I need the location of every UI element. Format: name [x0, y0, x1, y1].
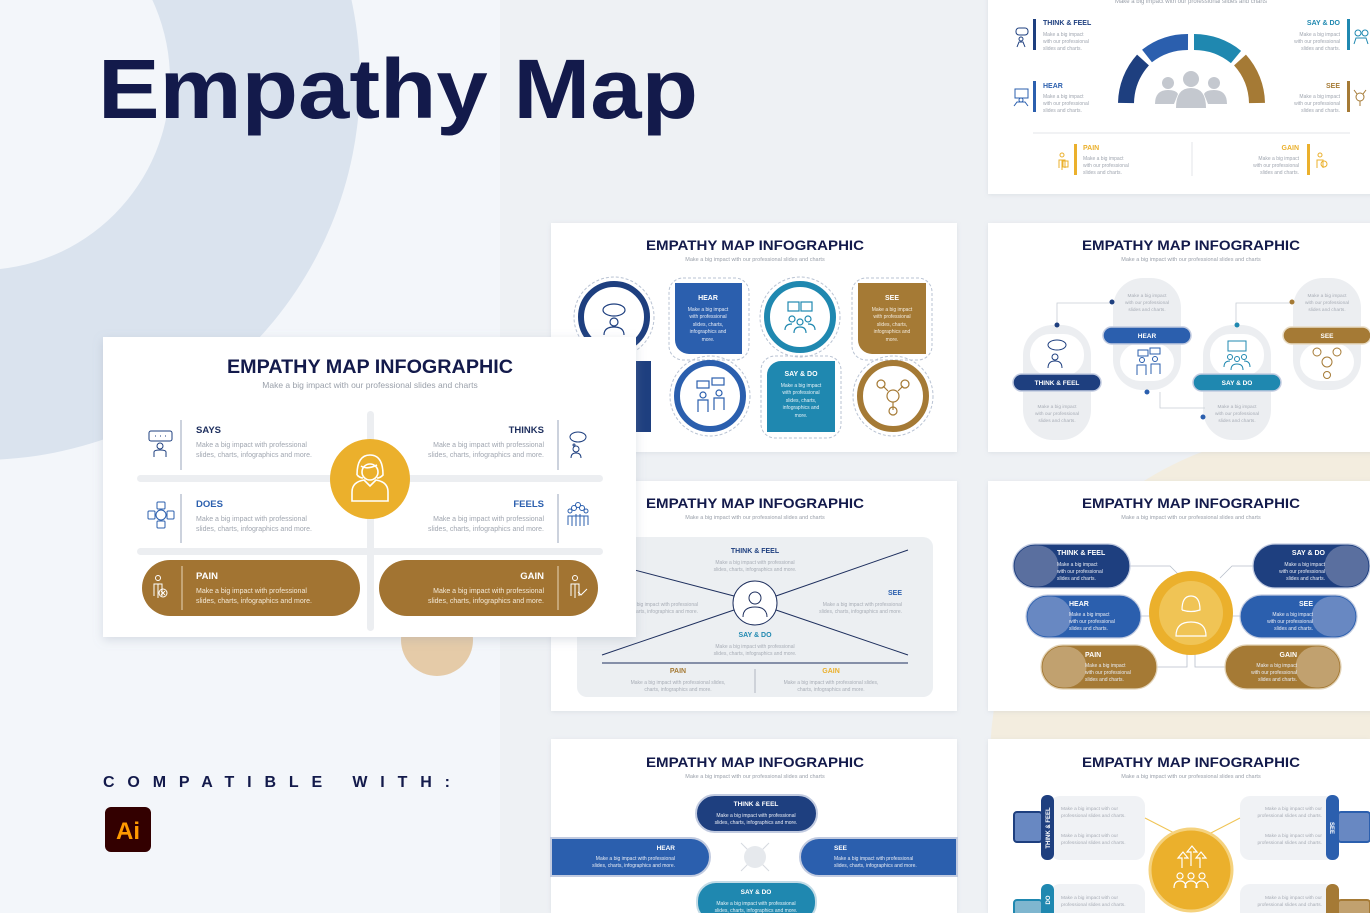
icon: people group	[1155, 71, 1227, 108]
block: thinks: Make a big impact with professional	[433, 442, 544, 449]
slide: tabs and center circle (bottom right): SEE	[1328, 822, 1334, 834]
slide: cross pills (bottom): SAY & DO	[741, 889, 771, 896]
slide: pill columns: Make a big impact	[1218, 404, 1257, 410]
block: says: slides, charts, infographics and more.	[196, 452, 312, 459]
block: says	[149, 420, 312, 470]
slide: tabs and center circle (bottom right): professional slides and charts.	[1061, 840, 1126, 846]
pill: pain: Make a big impact with professional	[196, 588, 307, 595]
slide: x lines: Make a big impact with professional	[619, 602, 698, 608]
block: feels: slides, charts, infographics and more.	[428, 526, 544, 533]
slide: radial pills: Make a big impact	[1256, 663, 1298, 669]
block: thinks: slides, charts, infographics and more.	[428, 452, 544, 459]
slide: radial pills: slides and charts.	[1085, 677, 1124, 683]
slide: pill columns	[988, 223, 1370, 452]
slide: semicircle (top right): SAY & DO	[1307, 20, 1341, 27]
slide: radial pills: PAIN	[1085, 652, 1101, 659]
slide: semicircle (top right): THINK & FEEL	[1043, 20, 1092, 27]
slide: radial pills: with our professional	[1069, 619, 1115, 625]
grid bars	[137, 411, 603, 631]
slide: semicircle (top right): Make a big impact	[1258, 156, 1300, 162]
slide: pill columns: with our professional	[1035, 411, 1079, 417]
slide: x lines: PAIN	[670, 668, 686, 675]
block: feels	[428, 494, 588, 543]
slide: x lines: Make a big impact with our professional slides and charts	[685, 515, 825, 521]
slide: radial pills: Make a big impact	[1284, 562, 1326, 568]
slide: pill columns: HEAR	[1138, 333, 1157, 340]
slide: circles and cards: with professional	[782, 390, 820, 396]
slide: circles and cards: EMPATHY MAP INFOGRAPHIC	[646, 237, 864, 253]
block: does	[148, 494, 312, 543]
slide: pill columns: slides and charts.	[1128, 307, 1166, 313]
slide: circles and cards: Make a big impact	[781, 383, 822, 389]
slide: tabs and center circle (bottom right): EMPATHY MAP INFOGRAPHIC	[1082, 754, 1300, 770]
slide: x lines: Make a big impact with professional	[715, 644, 795, 650]
slide: pill columns: with our professional	[1125, 300, 1169, 306]
block: thinks	[428, 420, 586, 470]
main slide heading: EMPATHY MAP INFOGRAPHIC	[227, 357, 513, 378]
panel: main empathy map slide	[103, 337, 636, 637]
slide: pill columns: with our professional	[1305, 300, 1349, 306]
slide: cross pills (bottom): slides, charts, infographics and more.	[715, 820, 797, 826]
slide: cross pills (bottom): THINK & FEEL	[734, 801, 778, 808]
slide: circles and cards: infographics and	[874, 329, 911, 335]
slide: tabs and center circle (bottom right): Make a big impact with our	[1265, 895, 1322, 901]
slide: pill columns: THINK & FEEL	[1035, 380, 1079, 387]
slide: radial pills: slides and charts.	[1258, 677, 1297, 683]
slide: circles and cards: with professional	[873, 314, 911, 320]
slide: x lines: SEE	[888, 590, 902, 597]
slide: semicircle (top right): Make a big impact	[1299, 32, 1341, 38]
block: says: SAYS	[196, 425, 221, 436]
slide: semicircle (top right): Make a big impact	[1043, 32, 1084, 38]
block: feels: Make a big impact with professional	[433, 516, 544, 523]
pill: pain: PAIN	[196, 571, 218, 582]
slide: tabs and center circle (bottom right): Make a big impact with our	[1265, 806, 1322, 812]
slide: cross pills (bottom): EMPATHY MAP INFOGRAPHIC	[646, 754, 864, 770]
slide: radial pills: Make a big impact	[1272, 612, 1314, 618]
slide: semicircle (top right): Make a big impact	[1299, 94, 1341, 100]
slide: radial pills: with our professional	[1085, 670, 1131, 676]
slide: radial pills: Make a big impact	[1069, 612, 1110, 618]
slide: circles and cards	[551, 223, 957, 452]
slide: semicircle (top right): Make a big impact	[1043, 94, 1084, 100]
slide: radial pills: with our professional	[1279, 569, 1325, 575]
slide: radial pills: slides and charts.	[1274, 626, 1313, 632]
slide: semicircle (top right): with our professional	[1294, 101, 1340, 107]
slide: x lines: Make a big impact with professional	[715, 560, 795, 566]
main slide heading	[227, 357, 513, 390]
slide: circles and cards: more.	[795, 413, 807, 419]
slide: x lines	[551, 481, 957, 711]
slide: pill columns: Make a big impact	[1128, 293, 1167, 299]
slide: semicircle (top right): Make a big impact	[1083, 156, 1124, 162]
slide: tabs and center circle (bottom right): Make a big impact with our	[1061, 806, 1118, 812]
block: does: slides, charts, infographics and more.	[196, 526, 312, 533]
slide: circles and cards: slides, charts,	[877, 322, 907, 328]
icon: adobe illustrator: Ai	[116, 818, 140, 845]
compatible with label: COMPATIBLE WITH:	[103, 774, 450, 791]
slide: semicircle (top right): slides and charts.	[1301, 46, 1340, 52]
slide: tabs and center circle (bottom right): Make a big impact with our	[1061, 895, 1118, 901]
slide: x lines: slides, charts, infographics and more.	[714, 567, 796, 573]
pill: pain	[142, 560, 360, 616]
slide: x lines: THINK & FEEL	[731, 548, 780, 555]
pill: gain: slides, charts, infographics and more.	[428, 598, 544, 605]
slide: x lines: Make a big impact with professional	[823, 602, 902, 608]
slide: semicircle (top right): PAIN	[1083, 145, 1099, 152]
slide: x lines: GAIN	[822, 668, 840, 675]
pill: gain: GAIN	[520, 571, 544, 582]
slide: circles and cards: Make a big impact	[688, 307, 729, 313]
slide: radial pills: slides and charts.	[1069, 626, 1108, 632]
slide: circles and cards: slides, charts,	[693, 322, 723, 328]
slide: semicircle (top right): HEAR	[1043, 83, 1063, 90]
slide: tabs and center circle (bottom right): Make a big impact with our	[1265, 833, 1322, 839]
slide: circles and cards: SAY & DO	[784, 371, 818, 378]
slide: radial pills: with our professional	[1057, 569, 1103, 575]
slide: tabs and center circle (bottom right)	[988, 739, 1370, 913]
slide: tabs and center circle (bottom right): professional slides and charts.	[1257, 902, 1322, 908]
slide: tabs and center circle (bottom right): DO	[1046, 895, 1052, 904]
slide: semicircle (top right): slides and charts.	[1083, 170, 1122, 176]
slide: circles and cards: slides, charts,	[786, 398, 816, 404]
slide: x lines: slides, charts, infographics and more.	[714, 651, 796, 657]
block: says: Make a big impact with professional	[196, 442, 307, 449]
slide: cross pills (bottom)	[551, 739, 957, 913]
pill: gain: Make a big impact with professional	[433, 588, 544, 595]
slide: circles and cards: Make a big impact	[872, 307, 913, 313]
slide: x lines: Make a big impact with professional slides,	[784, 680, 878, 686]
slide: x lines: slides, charts, infographics and more.	[615, 609, 698, 615]
slide: semicircle (top right): with our professional	[1043, 39, 1089, 45]
slide: radial pills: EMPATHY MAP INFOGRAPHIC	[1082, 495, 1300, 511]
slide: tabs and center circle (bottom right): professional slides and charts.	[1061, 813, 1126, 819]
slide: circles and cards: Make a big impact with our professional slides and charts	[685, 257, 825, 263]
slide: tabs and center circle (bottom right): professional slides and charts.	[1257, 840, 1322, 846]
slide: circles and cards: SEE	[885, 295, 899, 302]
slide: pill columns: Make a big impact	[1038, 404, 1077, 410]
slide: radial pills: SAY & DO	[1292, 550, 1326, 557]
slide: circles and cards: infographics and	[783, 405, 820, 411]
slide: cross pills (bottom): slides, charts, infographics and more.	[834, 863, 917, 869]
slide: radial pills: with our professional	[1267, 619, 1313, 625]
slide: semicircle (top right): slides and charts.	[1260, 170, 1299, 176]
slide: circles and cards: with professional	[689, 314, 727, 320]
slide: circles and cards: infographics and	[690, 329, 727, 335]
block: does: Make a big impact with professional	[196, 516, 307, 523]
slide: pill columns: Make a big impact	[1308, 293, 1347, 299]
slide: tabs and center circle (bottom right): Make a big impact with our professional slides and charts	[1121, 774, 1261, 780]
slide: semicircle (top right): slides and charts.	[1043, 46, 1082, 52]
slide: x lines: SAY & DO	[738, 632, 772, 639]
slide: pill columns: with our professional	[1215, 411, 1259, 417]
slide: semicircle (top right): with our professional	[1294, 39, 1340, 45]
slide: pill columns: EMPATHY MAP INFOGRAPHIC	[1082, 237, 1300, 253]
icon: adobe illustrator	[105, 807, 151, 852]
slide: cross pills (bottom): Make a big impact with professional	[716, 813, 796, 819]
slide: tabs and center circle (bottom right): professional slides and charts.	[1061, 902, 1126, 908]
slide: radial pills	[988, 481, 1370, 711]
slide: cross pills (bottom): SEE	[834, 845, 848, 852]
slide: radial pills: Make a big impact	[1085, 663, 1126, 669]
pill: pain: slides, charts, infographics and more.	[196, 598, 312, 605]
slide: radial pills: slides and charts.	[1286, 576, 1325, 582]
slide: circles and cards: more.	[886, 337, 898, 343]
slide: x lines: charts, infographics and more.	[644, 687, 712, 693]
slide: x lines: Make a big impact with professional slides,	[631, 680, 725, 686]
slide: semicircle (top right): slides and charts.	[1301, 108, 1340, 114]
slide: radial pills: with our professional	[1251, 670, 1297, 676]
slide: semicircle (top right): with our professional	[1083, 163, 1129, 169]
center person circle	[330, 439, 410, 519]
slide: pill columns: SAY & DO	[1222, 380, 1252, 387]
slide: pill columns: slides and charts.	[1038, 418, 1076, 424]
pill: gain	[379, 560, 598, 616]
slide: x lines: slides, charts, infographics and more.	[819, 609, 902, 615]
block: does: DOES	[196, 499, 223, 510]
slide: semicircle (top right): with our professional	[1253, 163, 1299, 169]
slide: semicircle (top right): GAIN	[1282, 145, 1299, 152]
slide: pill columns: SEE	[1320, 333, 1334, 340]
slide: pill columns: slides and charts.	[1218, 418, 1256, 424]
slide: semicircle (top right): SEE	[1326, 83, 1340, 90]
slide: radial pills: THINK & FEEL	[1057, 550, 1106, 557]
slide: circles and cards: HEAR	[698, 295, 718, 302]
title: Empathy Map	[98, 42, 698, 136]
slide: cross pills (bottom): HEAR	[657, 845, 675, 852]
slide: cross pills (bottom): Make a big impact with professional	[596, 856, 675, 862]
slide: cross pills (bottom): Make a big impact with professional	[834, 856, 913, 862]
slide: x lines: charts, infographics and more.	[797, 687, 865, 693]
slide: x lines: EMPATHY MAP INFOGRAPHIC	[646, 495, 864, 511]
slide: cross pills (bottom): Make a big impact with professional	[716, 901, 796, 907]
slide: radial pills: Make a big impact	[1057, 562, 1098, 568]
block: thinks: THINKS	[509, 425, 544, 436]
slide: pill columns: Make a big impact with our professional slides and charts	[1121, 257, 1261, 263]
chart: semicircle arc segments	[1126, 42, 1257, 103]
slide: radial pills: HEAR	[1069, 601, 1089, 608]
slide: pill columns: slides and charts.	[1308, 307, 1346, 313]
slide: circles and cards: more.	[702, 337, 714, 343]
slide: cross pills (bottom): slides, charts, infographics and more.	[592, 863, 675, 869]
slide: radial pills: slides and charts.	[1057, 576, 1096, 582]
slide: tabs and center circle (bottom right): THINK & FEEL	[1046, 807, 1052, 849]
slide: tabs and center circle (bottom right): professional slides and charts.	[1257, 813, 1322, 819]
block: feels: FEELS	[513, 499, 544, 510]
main slide heading: Make a big impact with our professional slides and charts	[262, 380, 478, 390]
slide: tabs and center circle (bottom right): Make a big impact with our	[1061, 833, 1118, 839]
slide: semicircle (top right)	[988, 0, 1370, 194]
slide: cross pills (bottom): Make a big impact with our professional slides and charts	[685, 774, 825, 780]
slide: semicircle (top right): with our professional	[1043, 101, 1089, 107]
slide: radial pills: Make a big impact with our professional slides and charts	[1121, 515, 1261, 521]
slide: semicircle (top right): slides and charts.	[1043, 108, 1082, 114]
slide: radial pills: SEE	[1299, 601, 1313, 608]
slide: radial pills: GAIN	[1280, 652, 1297, 659]
